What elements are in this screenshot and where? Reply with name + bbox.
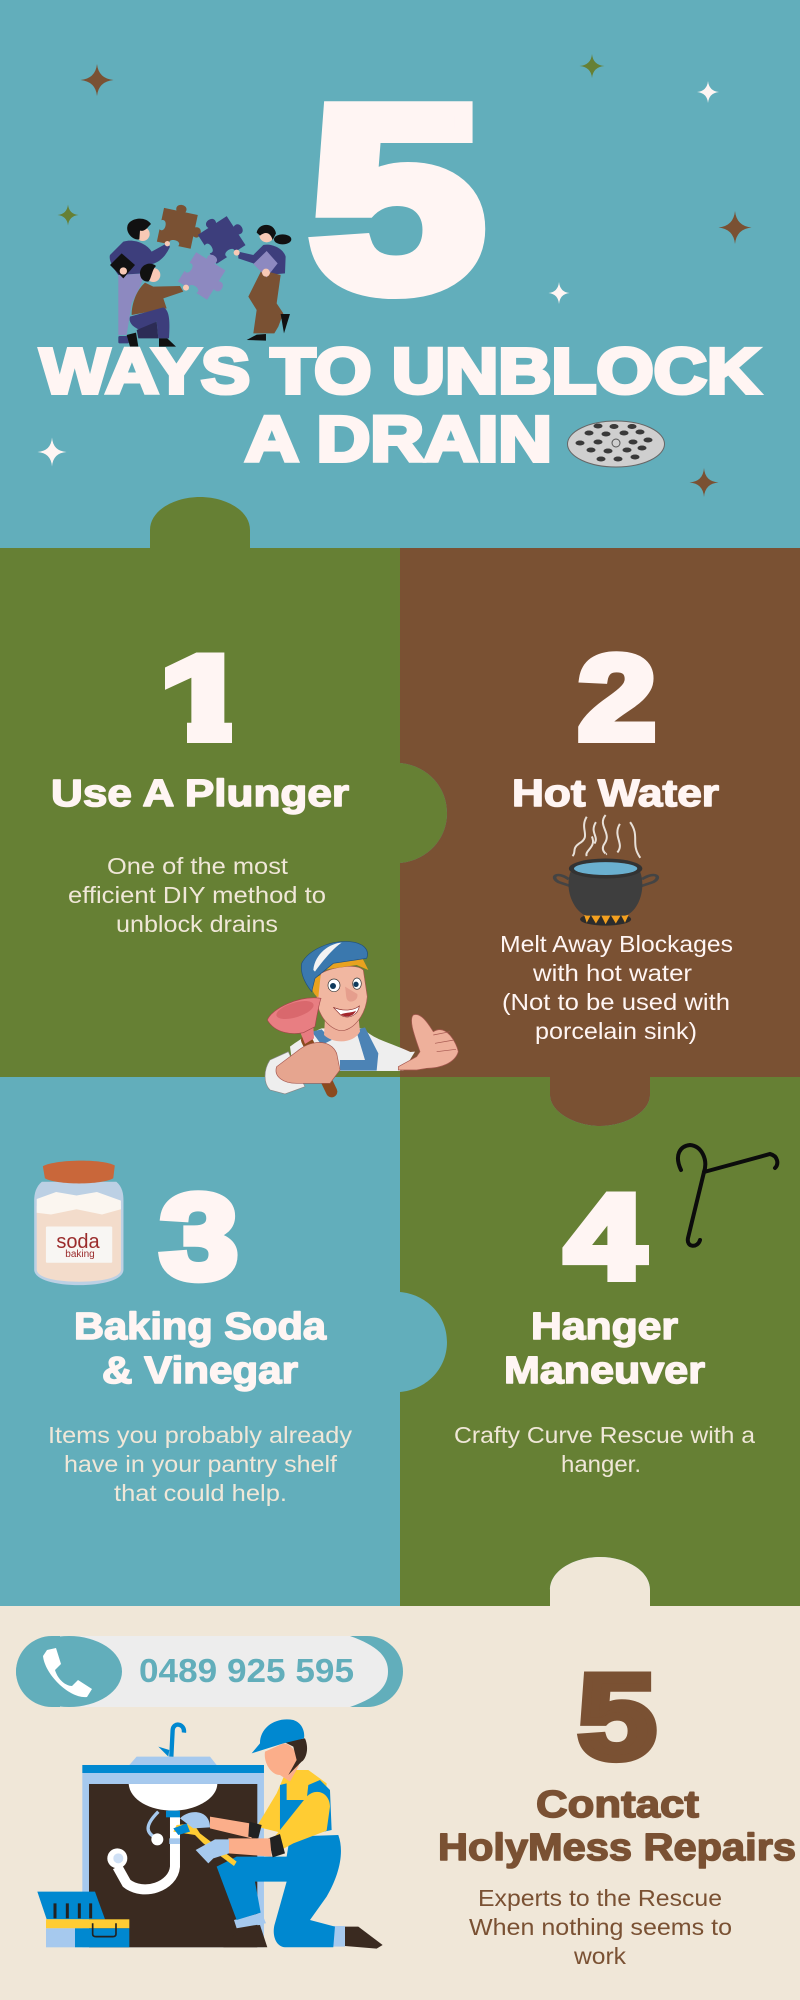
step 4 heading: [504, 1306, 705, 1392]
icon: baking soda jar: [34, 1161, 123, 1285]
step 1 body text: efficient DIY method to: [68, 882, 326, 908]
panel: step 1 plunger background: [0, 497, 447, 1077]
step 2 number: 2: [578, 631, 656, 765]
step 1 body text: unblock drains: [116, 911, 278, 937]
step 2 body text: with hot water: [532, 960, 692, 986]
big number 5: 5: [309, 52, 485, 345]
step 5 body text: [469, 1885, 732, 1969]
phone pill: [16, 1636, 403, 1707]
step 1 number: 1: [159, 631, 249, 765]
illustration: team with puzzle pieces: [110, 201, 291, 347]
sparkle stars: [38, 54, 752, 497]
step 5 body text: Experts to the Rescue: [478, 1885, 722, 1911]
title: WAYS TO UNBLOCK: [40, 335, 760, 407]
step 4 body text: hanger.: [561, 1451, 641, 1477]
step 3 body text: [48, 1422, 353, 1506]
step 5 body text: work: [573, 1943, 627, 1969]
step 2 body text: Melt Away Blockages: [500, 931, 733, 957]
title: [40, 335, 760, 475]
step 2 body text: (Not to be used with: [502, 989, 730, 1015]
panel: header background: [0, 0, 800, 548]
icon: boiling pot: [555, 815, 657, 926]
panel: step 5 contact background: [0, 1557, 800, 2000]
step 2 heading: Hot Water: [512, 773, 719, 815]
step 2 body text: porcelain sink): [535, 1018, 697, 1044]
step 3 body text: Items you probably already: [48, 1422, 353, 1448]
step 1 heading: Use A Plunger: [51, 773, 349, 815]
panel: step 3 baking soda background: [0, 1077, 447, 1606]
step 3 heading: [74, 1306, 327, 1392]
step 1 body text: One of the most: [107, 853, 289, 879]
title: A DRAIN: [245, 403, 552, 475]
icon: phone handset: [43, 1648, 92, 1697]
step 3 body text: have in your pantry shelf: [64, 1451, 338, 1477]
step 4 body text: [454, 1422, 755, 1477]
step 4 body text: Crafty Curve Rescue with a: [454, 1422, 755, 1448]
step 4 heading: Hanger: [531, 1306, 678, 1348]
step 5 heading: [438, 1784, 796, 1869]
step 5 heading: HolyMess Repairs: [438, 1827, 796, 1869]
step 3 heading: & Vinegar: [102, 1350, 298, 1392]
step 3 heading: Baking Soda: [74, 1306, 327, 1348]
step 5 heading: Contact: [536, 1784, 699, 1826]
phone number: 0489 925 595: [139, 1652, 354, 1689]
step 3 body text: that could help.: [114, 1480, 287, 1506]
step 4 number: 4: [565, 1170, 645, 1304]
panel: step 2 hot water background: [400, 548, 800, 1126]
panel: step 4 hanger background: [400, 1077, 800, 1606]
step 3 number: 3: [160, 1170, 238, 1304]
illustration: cartoon plumber with plunger: [265, 941, 458, 1094]
illustration: plumber fixing sink: [37, 1719, 383, 1949]
icon: baking soda jar: baking: [65, 1249, 95, 1260]
step 4 heading: Maneuver: [504, 1350, 705, 1392]
icon: coat hanger: [678, 1145, 777, 1246]
step 1 body text: [68, 853, 326, 937]
step 5 body text: When nothing seems to: [469, 1914, 732, 1940]
step 2 body text: [500, 931, 733, 1044]
step 5 number: 5: [578, 1650, 656, 1784]
icon: baking soda jar: soda: [56, 1231, 101, 1253]
icon: drain cover: [568, 421, 664, 467]
